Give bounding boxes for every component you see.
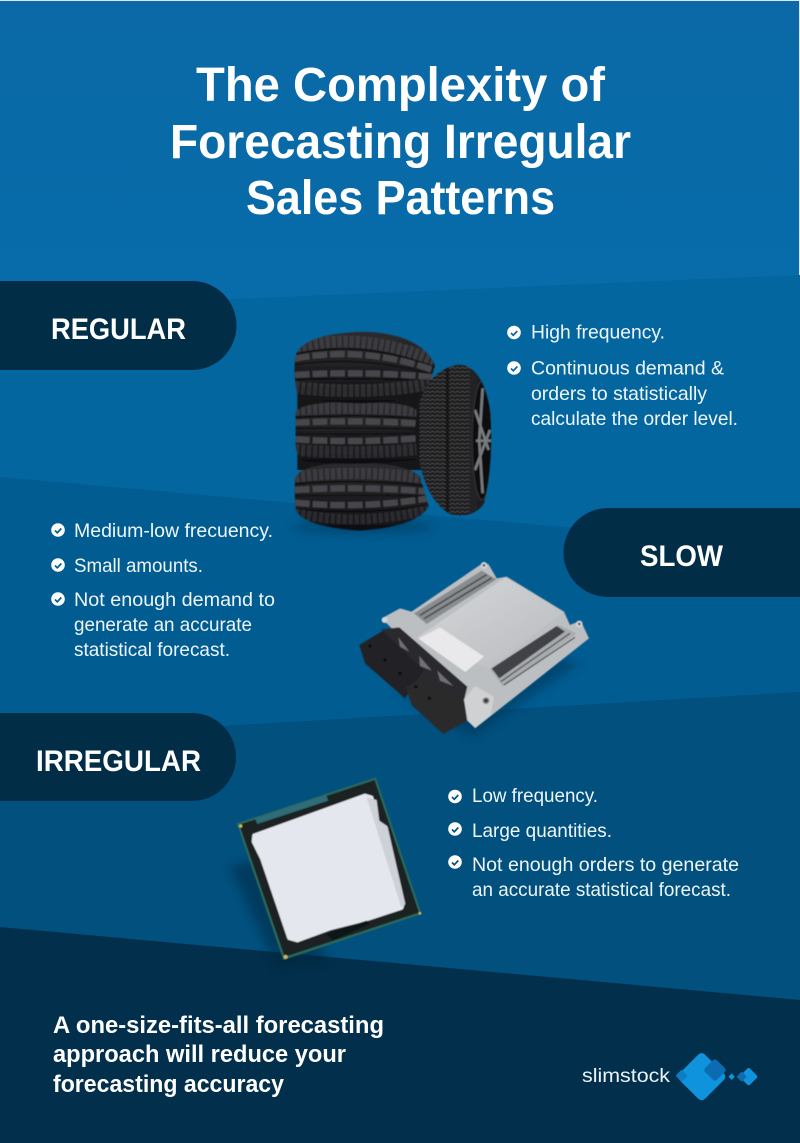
icon: check	[448, 790, 462, 803]
footer message: A one-size-fits-all forecasting	[53, 1012, 384, 1039]
footer message: approach will reduce your	[53, 1041, 346, 1068]
icon: check	[51, 558, 65, 572]
dark connector bracket	[382, 627, 467, 701]
text block: irregular bullets: Not enough orders to generate	[472, 854, 739, 876]
image: engine control unit	[359, 562, 589, 737]
icon: check	[448, 822, 462, 836]
text block: irregular bullets: Low frequency.	[472, 785, 598, 807]
icon: check	[51, 523, 65, 537]
panel: slow label	[564, 508, 800, 597]
image: processor chip	[230, 777, 422, 967]
icon: check	[448, 855, 462, 869]
text block: slow bullets: generate an accurate	[74, 614, 252, 636]
text block: regular bullets: orders to statistically	[531, 383, 707, 405]
icon: check	[507, 361, 521, 375]
logo: slimstock: slimstock	[582, 1065, 670, 1087]
logo: slimstock	[582, 1051, 758, 1102]
footer message	[53, 1012, 384, 1098]
title: Sales Patterns	[246, 172, 555, 225]
cooling ribs	[414, 571, 577, 687]
footer message: forecasting accuracy	[53, 1071, 285, 1098]
text block: regular bullets: Continuous demand &	[531, 358, 724, 380]
text block: slow bullets: Not enough demand to	[74, 589, 275, 611]
title	[170, 59, 631, 225]
connectors	[359, 631, 467, 734]
text block: irregular bullets: Large quantities.	[472, 820, 612, 842]
text block: slow bullets	[51, 520, 275, 661]
title: The Complexity of	[196, 59, 606, 112]
standing tyre	[413, 363, 493, 520]
icon: check	[51, 592, 65, 606]
panel: regular label: REGULAR	[51, 313, 186, 346]
icon: check	[507, 326, 521, 339]
panel: irregular label: IRREGULAR	[36, 745, 201, 778]
text block: irregular bullets	[448, 785, 739, 901]
title: Forecasting Irregular	[170, 116, 631, 169]
text block: regular bullets: High frequency.	[531, 322, 665, 344]
image: stack of tyres	[293, 331, 493, 534]
text block: irregular bullets: an accurate statistical forecast.	[472, 879, 731, 901]
panel: irregular label	[0, 713, 236, 801]
panel: regular label	[0, 281, 236, 370]
text block: regular bullets	[507, 322, 738, 430]
text block: slow bullets: Small amounts.	[74, 555, 203, 577]
text block: slow bullets: statistical forecast.	[74, 639, 230, 661]
text block: regular bullets: calculate the order level.	[531, 408, 738, 430]
panel: slow label: SLOW	[640, 540, 724, 573]
text block: slow bullets: Medium-low frecuency.	[74, 520, 273, 542]
